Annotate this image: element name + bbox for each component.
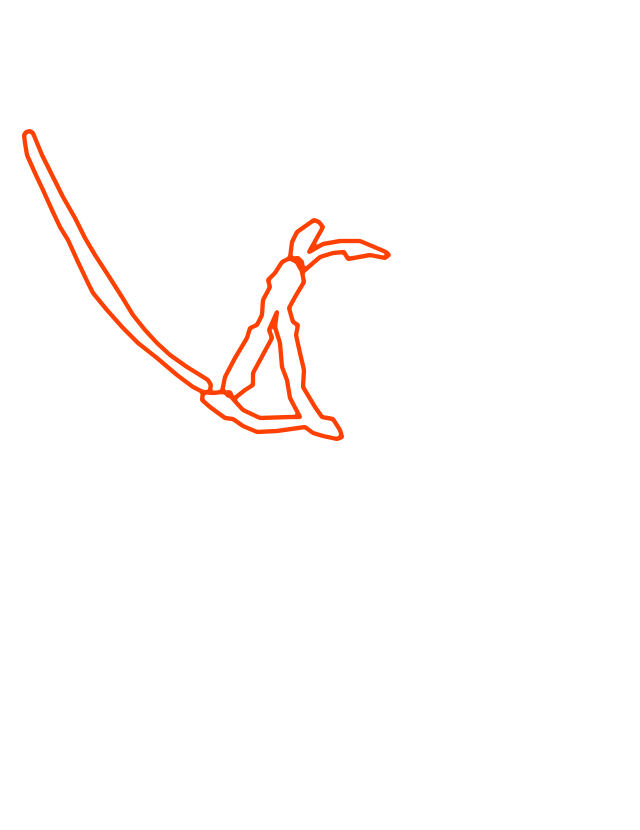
long tapered tail outline (24, 131, 211, 392)
inner leg gap outline (222, 312, 300, 418)
junction blob: hip (225, 390, 233, 398)
body and legs outline (202, 220, 389, 439)
junction blob: upper body (291, 258, 303, 272)
